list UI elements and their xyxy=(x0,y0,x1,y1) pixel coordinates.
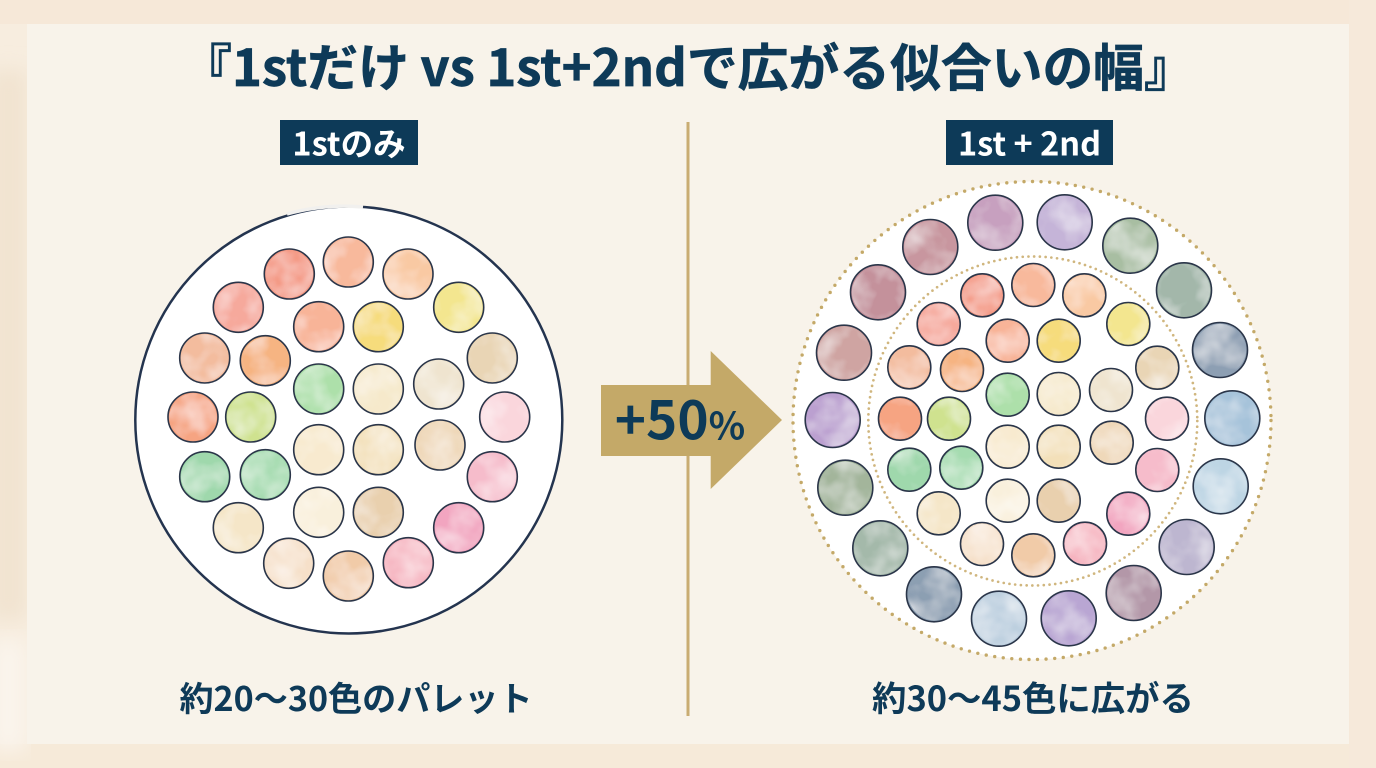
caption: 1st + 2nd: 約30〜45色に広がる xyxy=(872,671,1194,721)
color swatches: second season outer ring xyxy=(805,195,1260,646)
color swatches: first season inner ring xyxy=(878,264,1188,577)
panel: 1st only xyxy=(135,118,562,721)
arrow: +50% xyxy=(601,351,782,489)
palette circle: 1st + 2nd xyxy=(793,182,1271,660)
title: 『1stだけ vs 1st+2ndで広がる似合いの幅』 xyxy=(181,27,1195,101)
caption: 1st only: 約20〜30色のパレット xyxy=(179,671,533,721)
arrow: +50%: +50% xyxy=(615,380,745,456)
center divider line xyxy=(686,122,690,716)
label: 1st only: 1stのみ xyxy=(292,118,406,166)
palette circle: 1st only xyxy=(135,206,562,633)
label: 1st + 2nd: 1st + 2nd xyxy=(958,118,1101,166)
panel: 1st + 2nd xyxy=(793,118,1271,721)
color swatches: 1st only xyxy=(168,237,530,601)
